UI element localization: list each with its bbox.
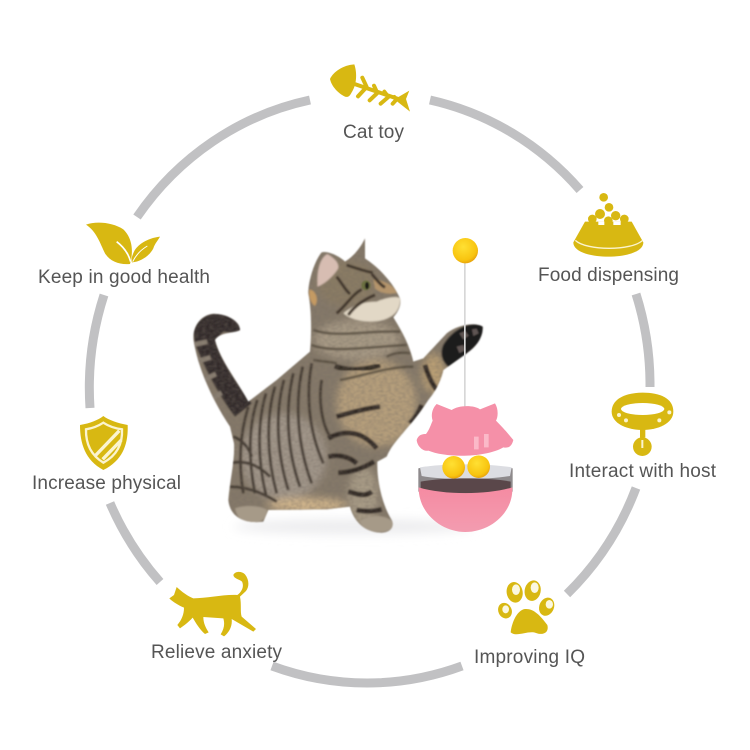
floor shadow (233, 519, 473, 534)
label: Increase physical: Increase physical (32, 473, 181, 494)
label: Improving IQ: Improving IQ (474, 647, 585, 668)
tail pale bands (193, 342, 222, 398)
collar stripe (335, 365, 380, 370)
front paws (235, 506, 267, 523)
icon: paw print (496, 579, 557, 634)
toy yellow ball (453, 238, 478, 263)
label: Interact with host: Interact with host (569, 461, 717, 482)
cream muzzle and chin (343, 297, 401, 322)
fur tone patches (238, 318, 447, 524)
haunch stripes (230, 363, 330, 502)
clear middle (418, 465, 513, 492)
label: Relieve anxiety: Relieve anxiety (151, 642, 282, 663)
leg and shoulder stripes (328, 365, 439, 511)
fur noise (194, 314, 444, 520)
tail dark (193, 314, 252, 417)
label: Keep in good health: Keep in good health (38, 267, 210, 288)
icon: food bowl (573, 193, 643, 257)
toy rod (464, 260, 466, 407)
tabby cat (190, 237, 487, 537)
label: Cat toy: Cat toy (343, 122, 404, 143)
icon: fish bone (330, 64, 410, 112)
yellow balls (442, 456, 465, 479)
photo: cat and toy (190, 237, 513, 537)
label: Food dispensing: Food dispensing (538, 265, 679, 286)
nose bridge (373, 279, 397, 294)
ear inner (317, 254, 338, 287)
icon: shield (80, 416, 128, 470)
icon: walking cat (169, 572, 256, 636)
pink base (419, 487, 512, 532)
eye (361, 280, 371, 290)
face stripes (337, 265, 385, 315)
ring of arc segments (89, 100, 650, 683)
pink toy (417, 403, 513, 532)
neck stripes (312, 330, 413, 380)
cheek patch (309, 289, 317, 306)
icon: collar with bell (612, 393, 673, 456)
icon: leaves (86, 223, 160, 264)
pink cap (417, 403, 513, 456)
raised paw pads (442, 324, 484, 367)
